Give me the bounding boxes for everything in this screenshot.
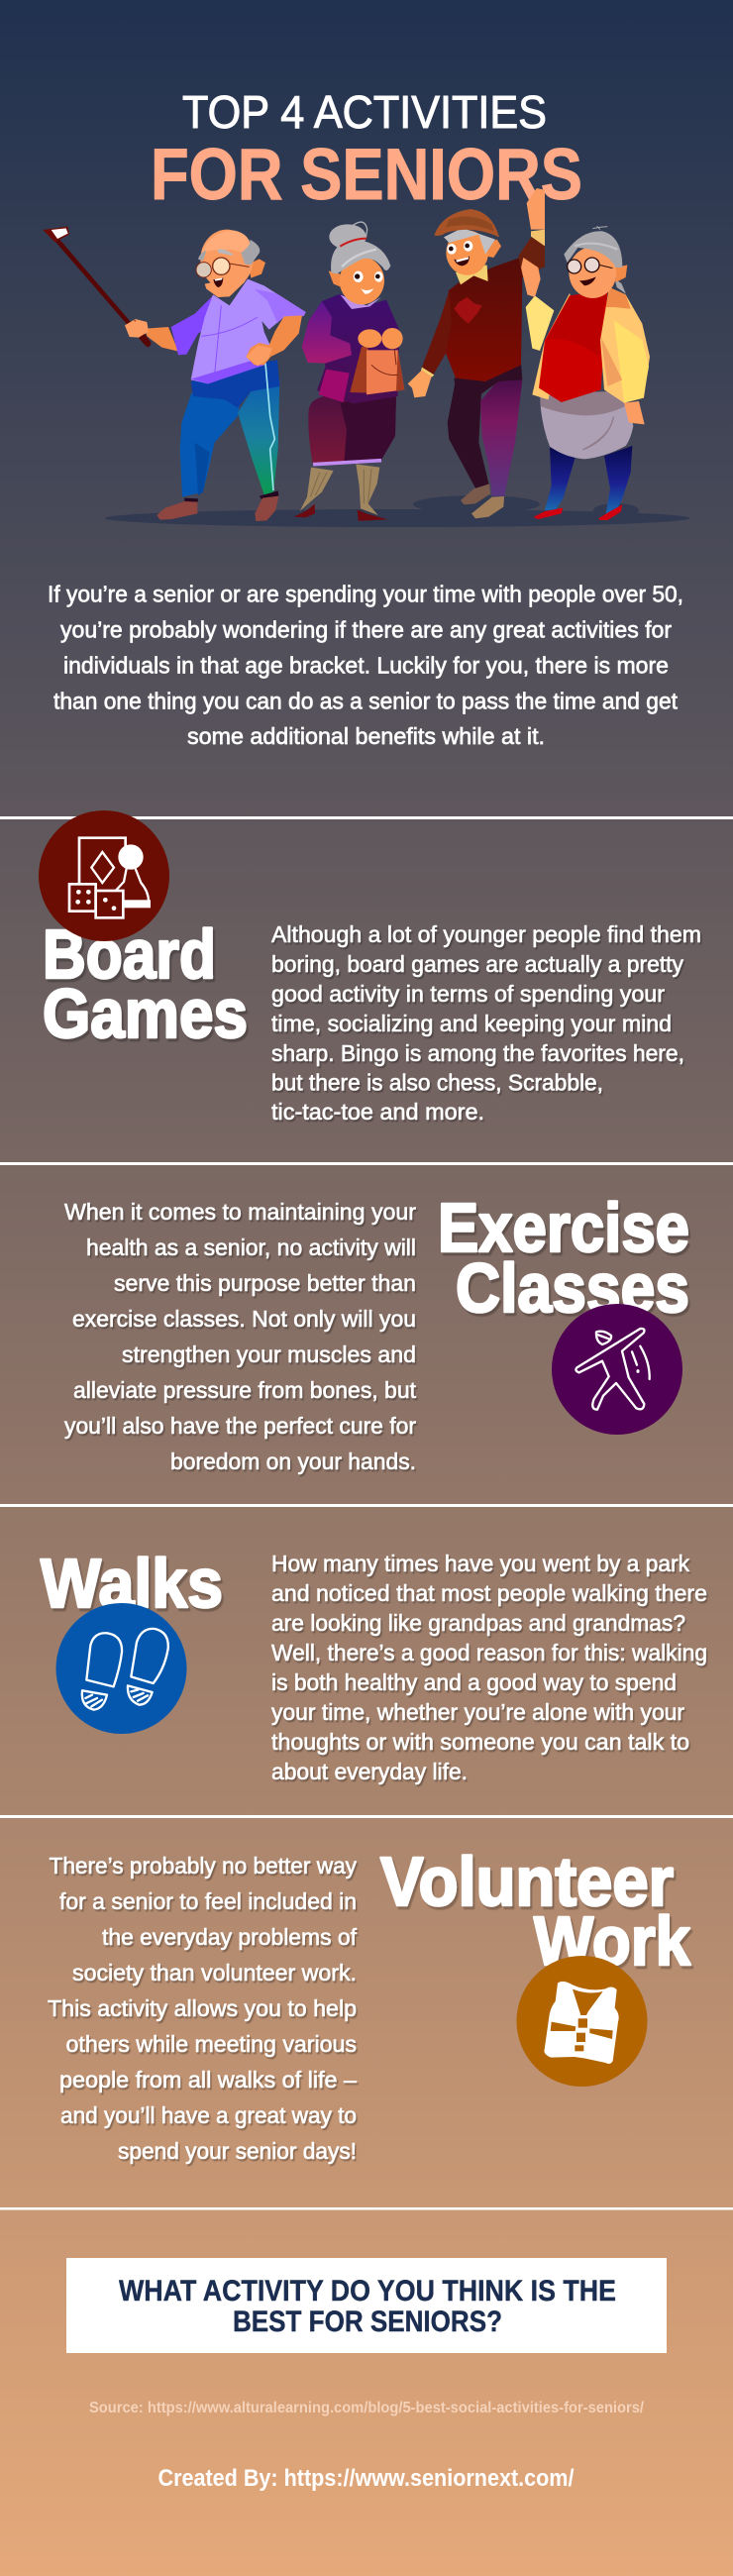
text: board games description: good activity in terms of spending your [271,981,665,1007]
illustration: four seniors taking a selfie [43,188,689,527]
figure: man with selfie stick [43,227,306,521]
text: walks description: your time, whether you’re alone with your [271,1699,684,1725]
text: board games description: boring, board games are actually a pretty [271,951,683,977]
intro paragraph: some additional benefits while at it. [187,723,545,749]
call to action box: BEST FOR SENIORS? [233,2306,502,2338]
text: volunteer work description: spend your senior days! [118,2138,357,2164]
text: board games description: time, socializing and keeping your mind [271,1011,672,1036]
text: volunteer work description: others while meeting various [65,2031,357,2057]
intro paragraph: individuals in that age bracket. Luckily for you, there is more [63,652,669,678]
text: exercise classes description: serve this purpose better than [114,1270,416,1296]
panel: walks [41,1545,707,1784]
icon: exercising person [552,1304,682,1435]
title [151,86,582,215]
text: walks description: How many times have you went by a park [271,1551,689,1576]
icon: footprints [55,1603,186,1734]
source line: Source: https://www.alturalearning.com/blog/5-best-social-activities-for-seniors/ [89,2400,645,2416]
text: board games description [271,921,701,1125]
text: exercise classes description [64,1199,417,1474]
title: TOP 4 ACTIVITIES [182,86,547,138]
text: walks description: and noticed that most people walking there [271,1580,707,1606]
text: walks description: is both healthy and a good way to spend [271,1669,677,1695]
heading: volunteer work [380,1843,690,1980]
heading: volunteer work: Work [534,1902,690,1980]
intro paragraph: you’re probably wondering if there are any great activities for [60,616,672,642]
panel: volunteer work [48,1843,690,2164]
credit line: Created By: https://www.seniornext.com/ [158,2465,575,2492]
title: FOR SENIORS [151,135,582,215]
heading: exercise classes: Exercise [438,1189,689,1266]
text: volunteer work description: This activity allows you to help [48,1995,357,2021]
heading: exercise classes [438,1189,689,1327]
text: exercise classes description: you’ll also have the perfect cure for [64,1413,416,1439]
call to action box [66,2258,667,2353]
icon: life vest [517,1956,648,2087]
text: volunteer work description: for a senior to feel included in [59,1888,357,1914]
text: walks description: about everyday life. [271,1759,468,1784]
text: volunteer work description: the everyday problems of [102,1924,358,1950]
text: board games description: sharp. Bingo is among the favorites here, [271,1040,684,1066]
intro paragraph [48,581,683,749]
figure: man in flat cap waving [408,188,545,518]
heading: board games: Board [43,915,216,993]
text: volunteer work description: society than volunteer work. [72,1960,357,1986]
text: board games description: but there is also chess, Scrabble, [271,1070,603,1096]
text: walks description [271,1551,707,1784]
ground shadow [105,495,689,527]
panel: board games [39,810,701,1125]
panel: exercise classes [64,1189,689,1474]
divider lines [0,816,733,2209]
figure: woman with handbag and bun [294,222,404,521]
heading: walks: Walks [41,1545,223,1622]
intro paragraph: If you’re a senior or are spending your time with people over 50, [48,581,683,606]
intro paragraph: than one thing you can do as a senior to pass the time and get [53,688,679,713]
heading: volunteer work: Volunteer [380,1843,674,1920]
text: exercise classes description: health as a senior, no activity will [86,1234,416,1260]
text: walks description: are looking like grandpas and grandmas? [271,1610,685,1636]
text: walks description: thoughts or with someone you can talk to [271,1729,689,1755]
text: volunteer work description: There’s probably no better way [50,1853,357,1878]
text: volunteer work description [48,1853,358,2164]
text: walks description: Well, there’s a good reason for this: walking [271,1640,707,1665]
text: board games description: Although a lot of younger people find them [271,921,701,947]
text: volunteer work description: and you’ll have a great way to [60,2102,357,2128]
heading: board games: Games [43,975,248,1052]
text: exercise classes description: alleviate pressure from bones, but [73,1377,417,1403]
figure: woman in yellow cardigan [521,226,650,520]
text: volunteer work description: people from all walks of life – [59,2067,357,2093]
heading: exercise classes: Classes [456,1249,689,1327]
text: exercise classes description: When it comes to maintaining your [64,1199,416,1225]
text: exercise classes description: boredom on your hands. [170,1449,416,1474]
text: board games description: tic-tac-toe and more. [271,1099,484,1125]
heading: board games [43,915,248,1052]
text: exercise classes description: exercise classes. Not only will you [72,1306,416,1332]
call to action box: WHAT ACTIVITY DO YOU THINK IS THE [119,2275,616,2308]
text: exercise classes description: strengthen your muscles and [122,1342,416,1367]
icon: card, pawn and dice [39,810,169,941]
